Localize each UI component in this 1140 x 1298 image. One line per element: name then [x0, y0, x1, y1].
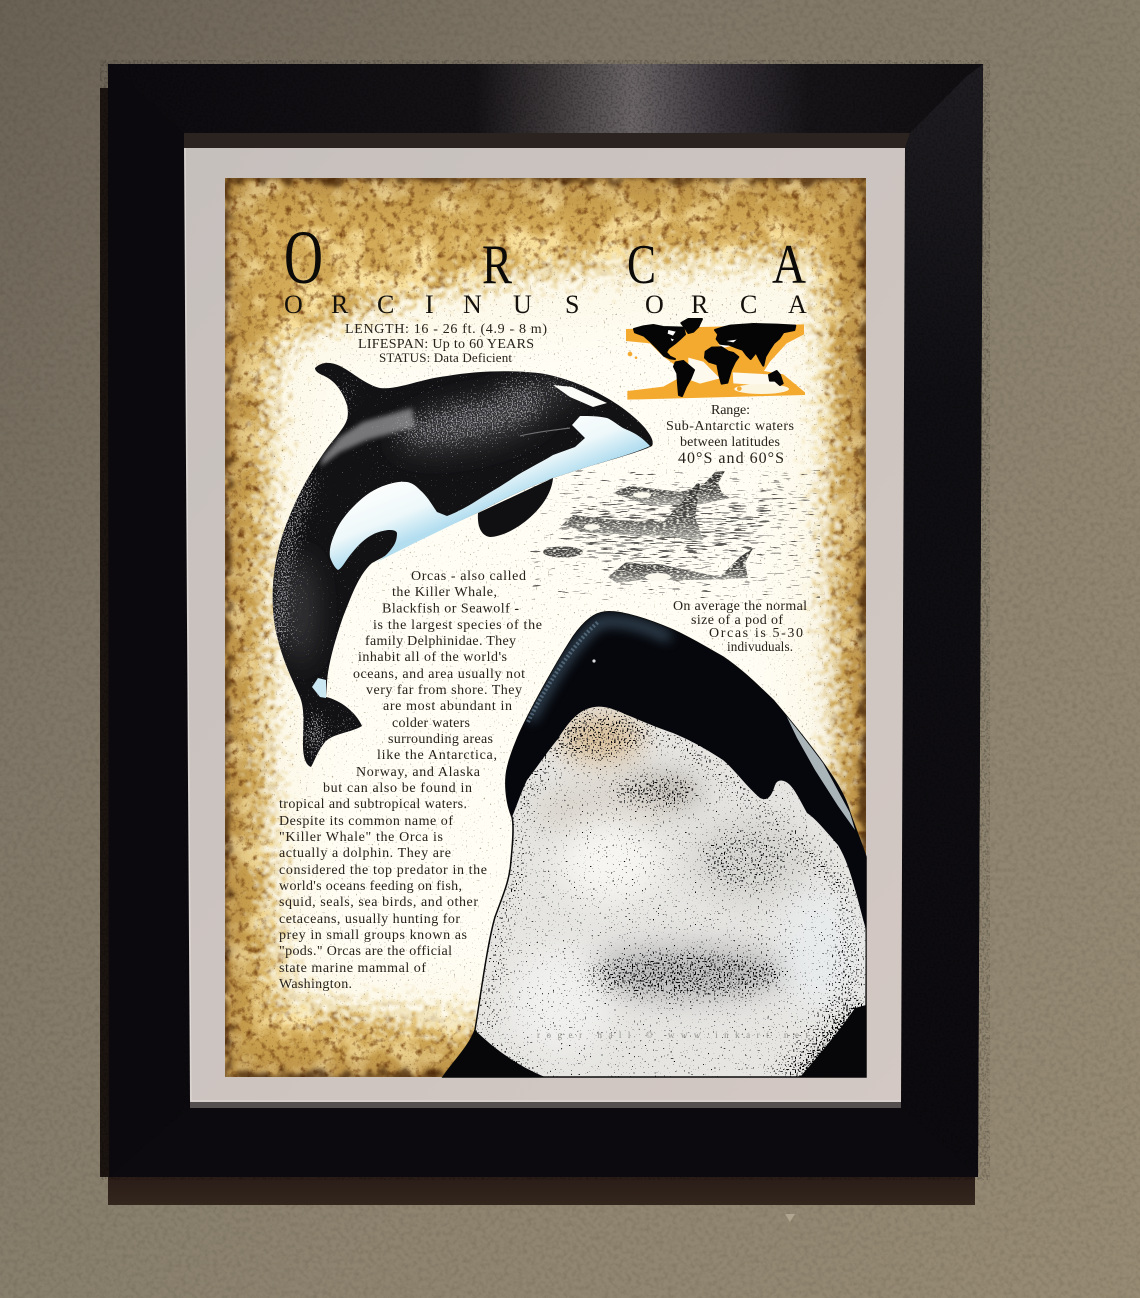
- main description text: but can also be found in: [323, 781, 472, 796]
- blue highlight: [530, 621, 670, 720]
- species facts: [345, 322, 547, 365]
- main description text: "pods." Orcas are the official: [279, 944, 452, 959]
- main description text: Norway, and Alaska: [356, 765, 481, 780]
- surfacing head: [543, 546, 583, 558]
- main description text: considered the top predator in the: [279, 863, 487, 878]
- main description text: inhabit all of the world's: [358, 650, 507, 665]
- main description text: surrounding areas: [388, 732, 493, 747]
- main description text: the Killer Whale,: [392, 585, 497, 600]
- title: ORCA: A: [772, 234, 806, 296]
- lakes and ice: [668, 330, 737, 348]
- fluke notch: [312, 678, 326, 698]
- belly marking: [330, 416, 650, 570]
- pod size note: On average the normal: [673, 599, 807, 614]
- illustration: leaping orca: [267, 363, 653, 767]
- title: ORCA: R: [482, 234, 513, 296]
- title: ORCA: [284, 216, 806, 300]
- title: ORCA: O: [284, 216, 323, 300]
- eye patch: [553, 385, 607, 407]
- pectoral fin: [478, 478, 553, 537]
- head base: [443, 612, 866, 1077]
- pod size note: indivuduals.: [727, 639, 793, 654]
- range caption: Range:: [711, 403, 750, 418]
- picture frame: [100, 64, 983, 1205]
- main description text: [279, 569, 542, 992]
- main description text: very far from shore. They: [366, 683, 522, 698]
- main description text: state marine mammal of: [279, 961, 426, 976]
- illustration: orca pod at surface: [543, 471, 796, 585]
- main description text: actually a dolphin. They are: [279, 846, 451, 861]
- main description text: is the largest species of the: [373, 618, 542, 633]
- main description text: colder waters: [392, 716, 470, 731]
- saddle patch: [320, 408, 415, 467]
- main description text: Despite its common name of: [279, 814, 453, 829]
- south atlantic gap: [688, 358, 720, 384]
- water hatching: [560, 496, 796, 585]
- black cap: [498, 612, 870, 930]
- main description text: Orcas - also called: [411, 569, 526, 584]
- main description text: are most abundant in: [383, 699, 512, 714]
- main description text: family Delphinidae. They: [365, 634, 516, 649]
- middle whale: [562, 483, 703, 540]
- pod size note: size of a pod of: [691, 613, 783, 628]
- near whale: [608, 548, 753, 583]
- main description text: world's oceans feeding on fish,: [279, 879, 462, 894]
- face stipple: [476, 707, 866, 1076]
- pod size note: Orcas is 5-30: [709, 626, 803, 641]
- range map: [626, 319, 805, 400]
- eye patches: [584, 492, 671, 581]
- main description text: "Killer Whale" the Orca is: [279, 830, 443, 845]
- species facts: STATUS: Data Deficient: [379, 350, 512, 365]
- main description text: oceans, and area usually not: [353, 667, 525, 682]
- species facts: LENGTH: 16 - 26 ft. (4.9 - 8 m): [345, 322, 547, 337]
- southern ocean gap: [734, 384, 789, 394]
- grey edge strip: [785, 713, 855, 830]
- orange range band: [626, 324, 805, 400]
- artist credit: roger hall © www.inkart.net: [537, 1030, 808, 1040]
- main description text: cetaceans, usually hunting for: [279, 912, 460, 927]
- range caption: 40°S and 60°S: [678, 450, 784, 467]
- illustration: orca head close-up: [440, 600, 870, 1080]
- subtitle: scientific name: ORCINUS ORCA: [284, 290, 807, 319]
- main description text: like the Antarctica,: [377, 748, 497, 763]
- pod size note: [673, 599, 807, 654]
- flipper line: [520, 428, 570, 436]
- main description text: prey in small groups known as: [279, 928, 467, 943]
- main description text: Blackfish or Seawolf -: [382, 602, 519, 616]
- main description text: tropical and subtropical waters.: [279, 797, 467, 812]
- lower right jaw: [800, 1005, 866, 1077]
- main description text: squid, seals, sea birds, and other: [279, 895, 478, 910]
- mat board: [184, 148, 905, 1102]
- body: [273, 363, 653, 767]
- soft face shading: [510, 714, 860, 1050]
- continents: [634, 319, 795, 396]
- indian ocean gap: [733, 372, 780, 387]
- title: ORCA: C: [627, 234, 656, 296]
- species facts: LIFESPAN: Up to 60 YEARS: [358, 337, 534, 352]
- range caption: between latitudes: [680, 435, 780, 450]
- lower left jaw: [443, 1030, 545, 1077]
- nail mark: [785, 1214, 795, 1222]
- distant whale: [613, 471, 730, 505]
- range caption: Sub-Antarctic waters: [666, 419, 794, 434]
- eye speck: [592, 659, 596, 663]
- range caption: [666, 403, 794, 467]
- skin stipple: [267, 375, 588, 759]
- range spots: [628, 352, 797, 391]
- main description text: Washington.: [279, 977, 352, 992]
- parchment poster: [225, 178, 866, 1077]
